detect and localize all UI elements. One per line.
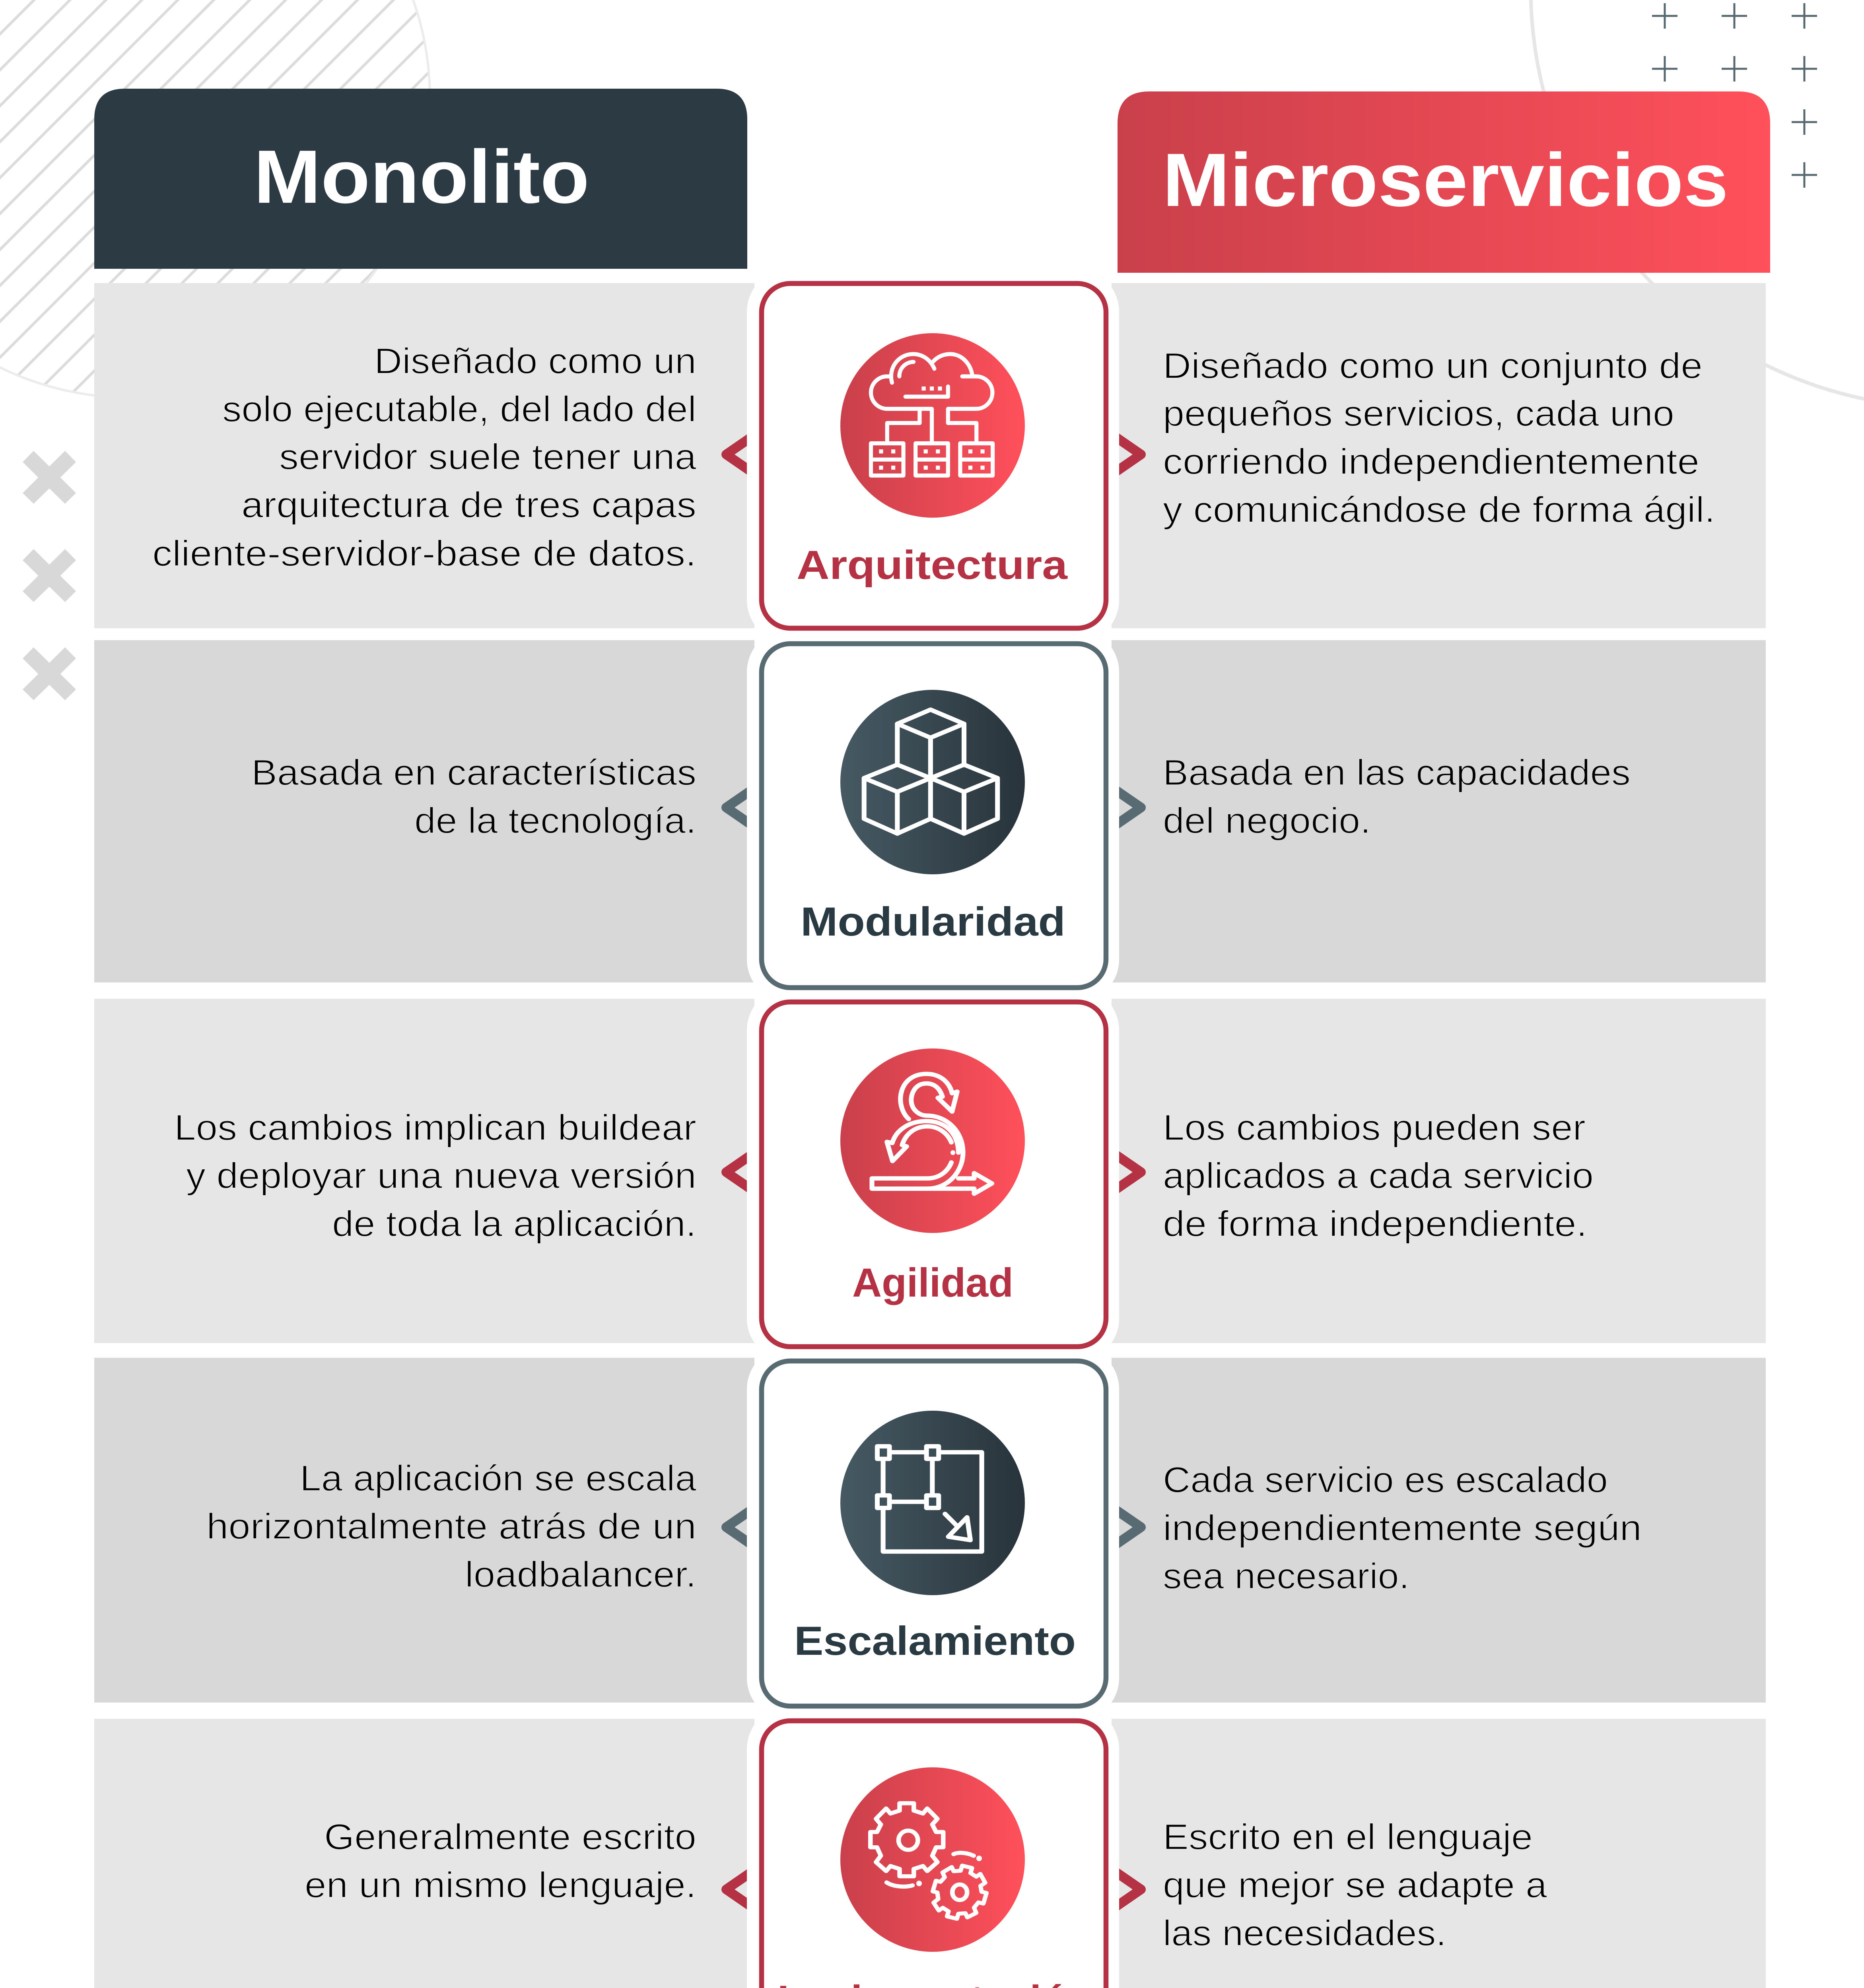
row 4 left panel: Monolito escalamiento: horizontalmente atrás de un — [206, 1507, 696, 1547]
header: Monolito: Monolito — [254, 135, 589, 219]
decoration: grey X marks left — [23, 451, 76, 700]
row 4 right panel: Microservicios escalamiento: sea necesario. — [1163, 1556, 1409, 1596]
card: Implementación — [762, 1721, 1106, 1988]
row 1 right panel: Microservicios arquitectura — [1112, 283, 1766, 628]
row 1 left panel: Monolito arquitectura: arquitectura de tres capas — [241, 485, 696, 525]
row 3 left panel: Monolito agilidad — [94, 999, 754, 1343]
row 1 left panel: Monolito arquitectura — [94, 283, 754, 628]
row 2 right panel: Microservicios modularidad: del negocio. — [1163, 801, 1371, 841]
header: Microservicios — [1118, 91, 1770, 273]
card: Agilidad — [762, 1002, 1106, 1347]
row 5 right panel: Microservicios implementacion: las necesidades. — [1163, 1913, 1446, 1953]
row 5 left panel: Monolito implementacion: Generalmente escrito — [324, 1817, 696, 1857]
icon: scaling square — [840, 1411, 1025, 1595]
row 3 right panel: Microservicios agilidad — [1112, 999, 1766, 1343]
row 5 left panel: Monolito implementacion: en un mismo lenguaje. — [305, 1865, 696, 1905]
row 5 left panel: Monolito implementacion — [94, 1719, 754, 1988]
icon: cloud with servers — [840, 333, 1025, 518]
decoration: circle outline top right — [1531, 0, 1864, 408]
icon: scrum cycle arrow — [840, 1048, 1025, 1233]
row 5 right panel: Microservicios implementacion: que mejor se adapte a — [1163, 1865, 1547, 1905]
row 1 left panel: Monolito arquitectura: servidor suele tener una — [279, 437, 696, 477]
row 4 left panel: Monolito escalamiento: loadbalancer. — [465, 1555, 696, 1595]
row 2 left panel: Monolito modularidad: de la tecnología. — [414, 801, 696, 841]
row 3 right panel: Microservicios agilidad: de forma independiente. — [1163, 1204, 1587, 1244]
label: Arquitectura: Arquitectura — [797, 542, 1068, 588]
row 4 left panel: Monolito escalamiento — [94, 1358, 754, 1703]
decoration: plus signs top right — [1652, 3, 1817, 188]
label: Modularidad: Modularidad — [801, 899, 1065, 944]
arrows: chevrons pointing left and right — [726, 434, 1141, 1988]
row 4 right panel: Microservicios escalamiento: Cada servicio es escalado — [1163, 1460, 1608, 1500]
row 1 right panel: Microservicios arquitectura: Diseñado como un conjunto de — [1163, 346, 1703, 386]
white halos behind center cards — [747, 269, 1119, 1988]
row 4 right panel: Microservicios escalamiento: independientemente según — [1163, 1508, 1642, 1548]
icon: gears — [840, 1767, 1025, 1952]
card: Arquitectura — [762, 283, 1106, 628]
row 2 left panel: Monolito modularidad — [94, 640, 754, 982]
row 1 left panel: Monolito arquitectura: Diseñado como un — [374, 341, 696, 381]
row 3 left panel: Monolito agilidad: Los cambios implican buildear — [174, 1108, 696, 1148]
row 1 left panel: Monolito arquitectura: solo ejecutable, del lado del — [222, 389, 696, 429]
row 3 left panel: Monolito agilidad: y deployar una nueva versión — [186, 1156, 696, 1196]
header: Monolito — [94, 89, 747, 269]
label: Escalamiento: Escalamiento — [794, 1618, 1076, 1664]
row 1 right panel: Microservicios arquitectura: y comunicándose de forma ágil. — [1163, 490, 1715, 530]
row 1 left panel: Monolito arquitectura: cliente-servidor-base de datos. — [152, 534, 696, 574]
row 2 right panel: Microservicios modularidad: Basada en las capacidades — [1163, 753, 1631, 793]
label: Agilidad: Agilidad — [852, 1260, 1013, 1305]
row 1 right panel: Microservicios arquitectura: corriendo independientemente — [1163, 442, 1699, 482]
decoration: hatched circle top left — [0, 0, 430, 398]
header: Microservicios: Microservicios — [1162, 138, 1728, 222]
row 5 right panel: Microservicios implementacion — [1112, 1719, 1766, 1988]
card: Escalamiento — [762, 1361, 1106, 1706]
row 3 right panel: Microservicios agilidad: aplicados a cada servicio — [1163, 1156, 1594, 1196]
row 1 right panel: Microservicios arquitectura: pequeños servicios, cada uno — [1163, 394, 1674, 434]
row 5 right panel: Microservicios implementacion: Escrito en el lenguaje — [1163, 1817, 1533, 1857]
card: Modularidad — [762, 644, 1106, 988]
row 4 right panel: Microservicios escalamiento — [1112, 1358, 1766, 1703]
row 2 left panel: Monolito modularidad: Basada en características — [251, 753, 696, 793]
row 4 left panel: Monolito escalamiento: La aplicación se escala — [300, 1458, 696, 1499]
row 3 left panel: Monolito agilidad: de toda la aplicación. — [332, 1204, 696, 1244]
row 2 right panel: Microservicios modularidad — [1112, 640, 1766, 982]
row 3 right panel: Microservicios agilidad: Los cambios pueden ser — [1163, 1108, 1586, 1148]
icon: cubes — [840, 690, 1025, 874]
